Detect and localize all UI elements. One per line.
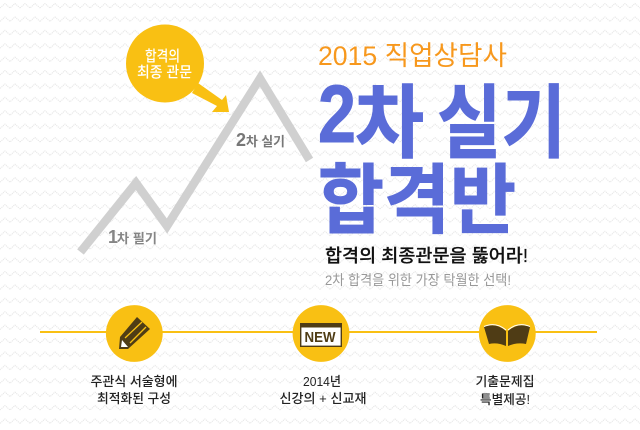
label: first stage written exam: 1 bbox=[108, 227, 118, 247]
label: first stage written exam bbox=[108, 227, 157, 247]
feature 2: NEW icon: NEW bbox=[304, 330, 336, 346]
main title line 1: 실기 bbox=[437, 79, 566, 168]
label: first stage written exam: 차 필기 bbox=[117, 231, 157, 246]
callout: final gate bubble with arrow: 최종 관문 bbox=[137, 64, 192, 81]
feature 2 caption: 신강의 + 신교재 bbox=[280, 391, 366, 406]
feature 3 caption: 기출문제집 bbox=[476, 374, 534, 389]
feature 2 caption bbox=[280, 374, 366, 406]
feature 1 caption: 주관식 서술형에 bbox=[90, 374, 178, 389]
label: second stage practical exam bbox=[236, 130, 285, 150]
callout: final gate bubble with arrow: 합격의 bbox=[145, 48, 180, 65]
main title line 1 bbox=[318, 69, 566, 168]
feature 3 caption bbox=[476, 374, 534, 407]
label: second stage practical exam: 2 bbox=[236, 130, 246, 150]
callout: final gate bubble with arrow bbox=[126, 24, 229, 112]
main title line 2: 합격반 bbox=[318, 159, 516, 244]
line chart: exam path bbox=[80, 78, 310, 252]
feature 1 caption bbox=[90, 374, 178, 406]
subtitle: 2015 vocational counselor: 2015 직업상담사 bbox=[318, 41, 507, 71]
feature 3: open book icon bbox=[479, 305, 536, 362]
main title line 1: 차 bbox=[355, 79, 424, 168]
main title line 1: 2 bbox=[318, 69, 356, 160]
feature 1 caption: 최적화된 구성 bbox=[97, 391, 171, 406]
feature 1: pencil icon bbox=[106, 305, 163, 362]
timeline line bbox=[40, 331, 597, 333]
feature 2 caption: 2014년 bbox=[303, 374, 341, 389]
feature 2: NEW icon bbox=[293, 305, 349, 362]
tagline: 합격의 최종관문을 뚫어라! bbox=[325, 246, 528, 266]
sub tagline: 2차 합격을 위한 가장 탁월한 선택! bbox=[325, 272, 511, 288]
feature 3 caption: 특별제공! bbox=[480, 392, 530, 407]
label: second stage practical exam: 차 실기 bbox=[246, 134, 285, 149]
